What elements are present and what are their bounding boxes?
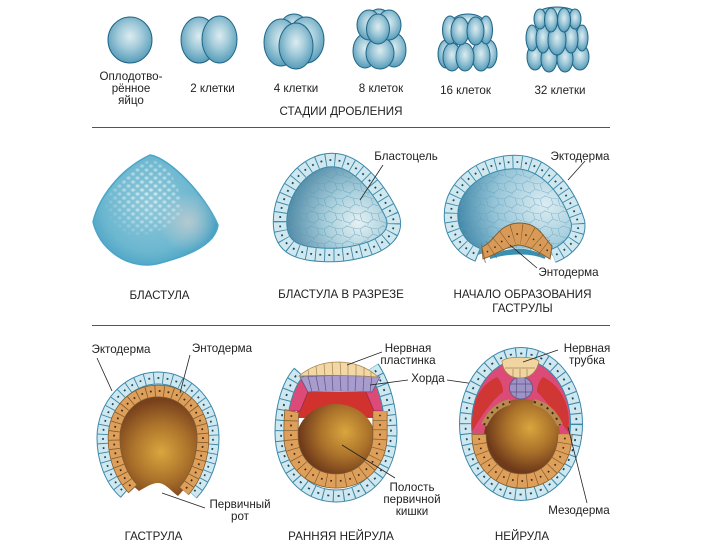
label: 16 cells: 16 клеток [440, 84, 492, 97]
panel: cleavage stages [100, 7, 589, 118]
callout: neural tube: трубка [569, 354, 606, 367]
callout: endoderm: Энтодерма [538, 266, 599, 279]
label: 32 cells: 32 клетки [534, 84, 586, 97]
callout: neural tube: Нервная [564, 342, 610, 355]
red mesoderm [296, 392, 376, 418]
callout: primary mouth [162, 493, 271, 523]
label: blastula: БЛАСТУЛА [129, 289, 190, 302]
callout: primary gut cavity: первичной [383, 493, 441, 506]
label: beginning of gastrula: НАЧАЛО ОБРАЗОВАНИЯ [454, 288, 592, 301]
diagram: neurula [466, 354, 576, 494]
label: fertilized egg: Оплодотво- [100, 70, 163, 83]
callout: primary gut cavity: кишки [396, 505, 428, 518]
panel: gastrula and neurula row [92, 342, 610, 543]
callout: ectoderm: Эктодерма [92, 343, 151, 356]
label: beginning of gastrula: ГАСТРУЛЫ [492, 302, 553, 315]
icon: 4 cells [264, 14, 324, 69]
cavity [116, 396, 202, 496]
gut cavity [296, 404, 376, 478]
callout: primary mouth: рот [231, 510, 250, 523]
label: neurula: НЕЙРУЛА [495, 530, 549, 543]
diagram: blastula cross-section [280, 160, 394, 255]
icon: 32 cells [526, 7, 589, 72]
callout: endoderm [510, 245, 599, 279]
callout: primary gut cavity: Полость [389, 481, 435, 494]
heading: cleavage stages: СТАДИИ ДРОБЛЕНИЯ [280, 105, 402, 118]
callout: neural tube [523, 342, 610, 367]
callout: blastocoel: Бластоцель [374, 150, 438, 163]
diagram: gastrula [103, 378, 213, 496]
callout: neural plate: Нервная [385, 342, 431, 355]
label: 8 cells: 8 клеток [359, 82, 404, 95]
callout: mesoderm [548, 427, 610, 517]
ectoderm [281, 367, 391, 496]
neural tube [502, 357, 539, 378]
blue opening under endoderm [490, 250, 545, 258]
callout: endoderm [180, 342, 253, 393]
panel: blastula row [93, 150, 610, 315]
label: 2 cells: 2 клетки [190, 82, 235, 95]
label: blastula cross-section: БЛАСТУЛА В РАЗРЕЗЕ [278, 288, 404, 301]
pink mesoderm sides [288, 377, 386, 411]
label: 4 cells: 4 клетки [274, 82, 318, 95]
callout: primary mouth: Первичный [209, 498, 271, 511]
label: fertilized egg: яйцо [118, 94, 144, 107]
notochord [510, 377, 532, 399]
callout: neural plate: пластинка [380, 354, 436, 367]
icon: fertilized egg [108, 17, 152, 63]
callout: blastocoel [360, 150, 438, 200]
label: beginning of gastrula [454, 288, 592, 315]
diagram: early neurula [281, 362, 391, 496]
icon: 8 cells [353, 9, 406, 69]
callout: endoderm: Энтодерма [192, 342, 253, 355]
ectoderm [466, 354, 576, 494]
cavity [484, 399, 560, 475]
callout: notochord: Хорда [411, 372, 445, 385]
label: gastrula: ГАСТРУЛА [125, 530, 183, 543]
diagram: blastula exterior [93, 155, 218, 265]
callout: primary gut cavity [342, 445, 441, 518]
mesoderm fill [471, 356, 571, 488]
top endoderm cells [484, 402, 560, 425]
neural plate [299, 362, 378, 377]
callout: ectoderm [92, 343, 151, 391]
endoderm [479, 434, 565, 481]
label: early neurula: РАННЯЯ НЕЙРУЛА [288, 530, 394, 543]
endoderm [291, 411, 380, 481]
diagram: beginning of gastrula [451, 162, 578, 259]
callout: neural plate [347, 342, 436, 367]
icon: 16 cells [438, 14, 497, 71]
endoderm band [482, 223, 552, 259]
label: fertilized egg: рённое [112, 82, 150, 95]
label: fertilized egg [100, 70, 163, 107]
callout: ectoderm [550, 150, 610, 180]
coelom crescents [471, 377, 569, 432]
callout: notochord [370, 372, 510, 389]
icon: 2 cells [181, 16, 237, 63]
callout: ectoderm: Эктодерма [550, 150, 610, 163]
notochord band [300, 376, 380, 392]
callout: mesoderm: Мезодерма [548, 504, 610, 517]
